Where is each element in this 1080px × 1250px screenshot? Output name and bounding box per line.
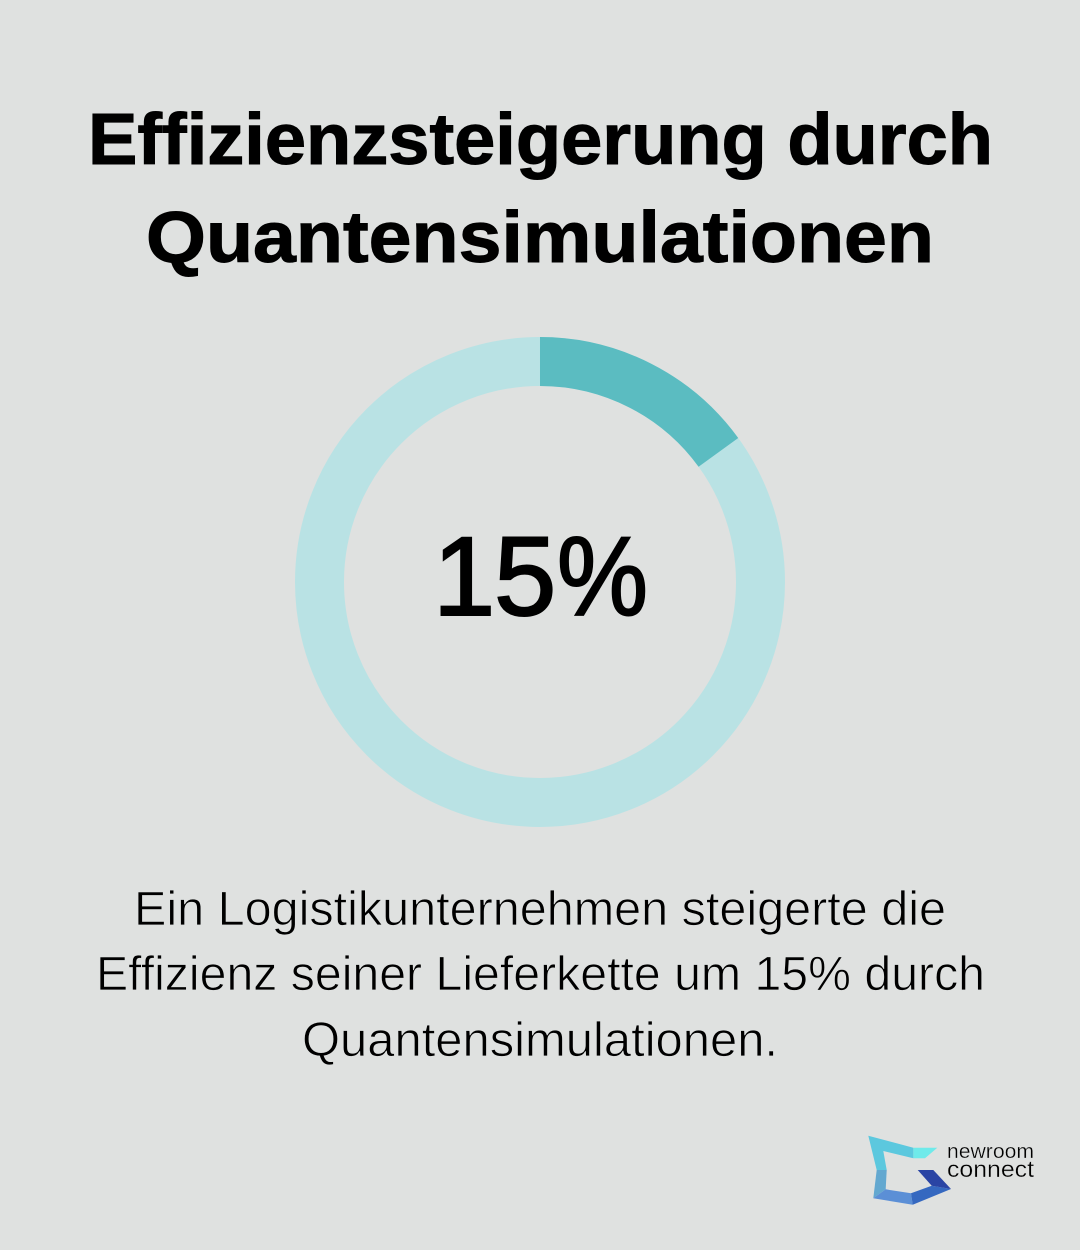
logo icon (868, 1136, 951, 1205)
title: Effizienzsteigerung durch (88, 100, 993, 180)
title (88, 100, 993, 278)
logo: newroom connect (868, 1136, 1035, 1205)
description: Ein Logistikunternehmen steigerte die (134, 883, 946, 936)
logo wordmark (947, 1141, 1035, 1182)
description: Effizienz seiner Lieferkette um 15% durch (96, 948, 985, 1001)
donut track (320, 362, 760, 802)
central value: 5 (494, 514, 556, 639)
title: Quantensimulationen (146, 198, 934, 278)
logo wordmark: newroom (947, 1141, 1034, 1163)
logo wordmark: connect (947, 1156, 1035, 1182)
donut chart: 15% (320, 362, 760, 802)
donut value segment (540, 362, 718, 452)
description (96, 883, 985, 1067)
central value: % (557, 514, 648, 639)
central value: 1 (433, 514, 495, 639)
description: Quantensimulationen. (302, 1014, 778, 1067)
central value (433, 514, 648, 639)
